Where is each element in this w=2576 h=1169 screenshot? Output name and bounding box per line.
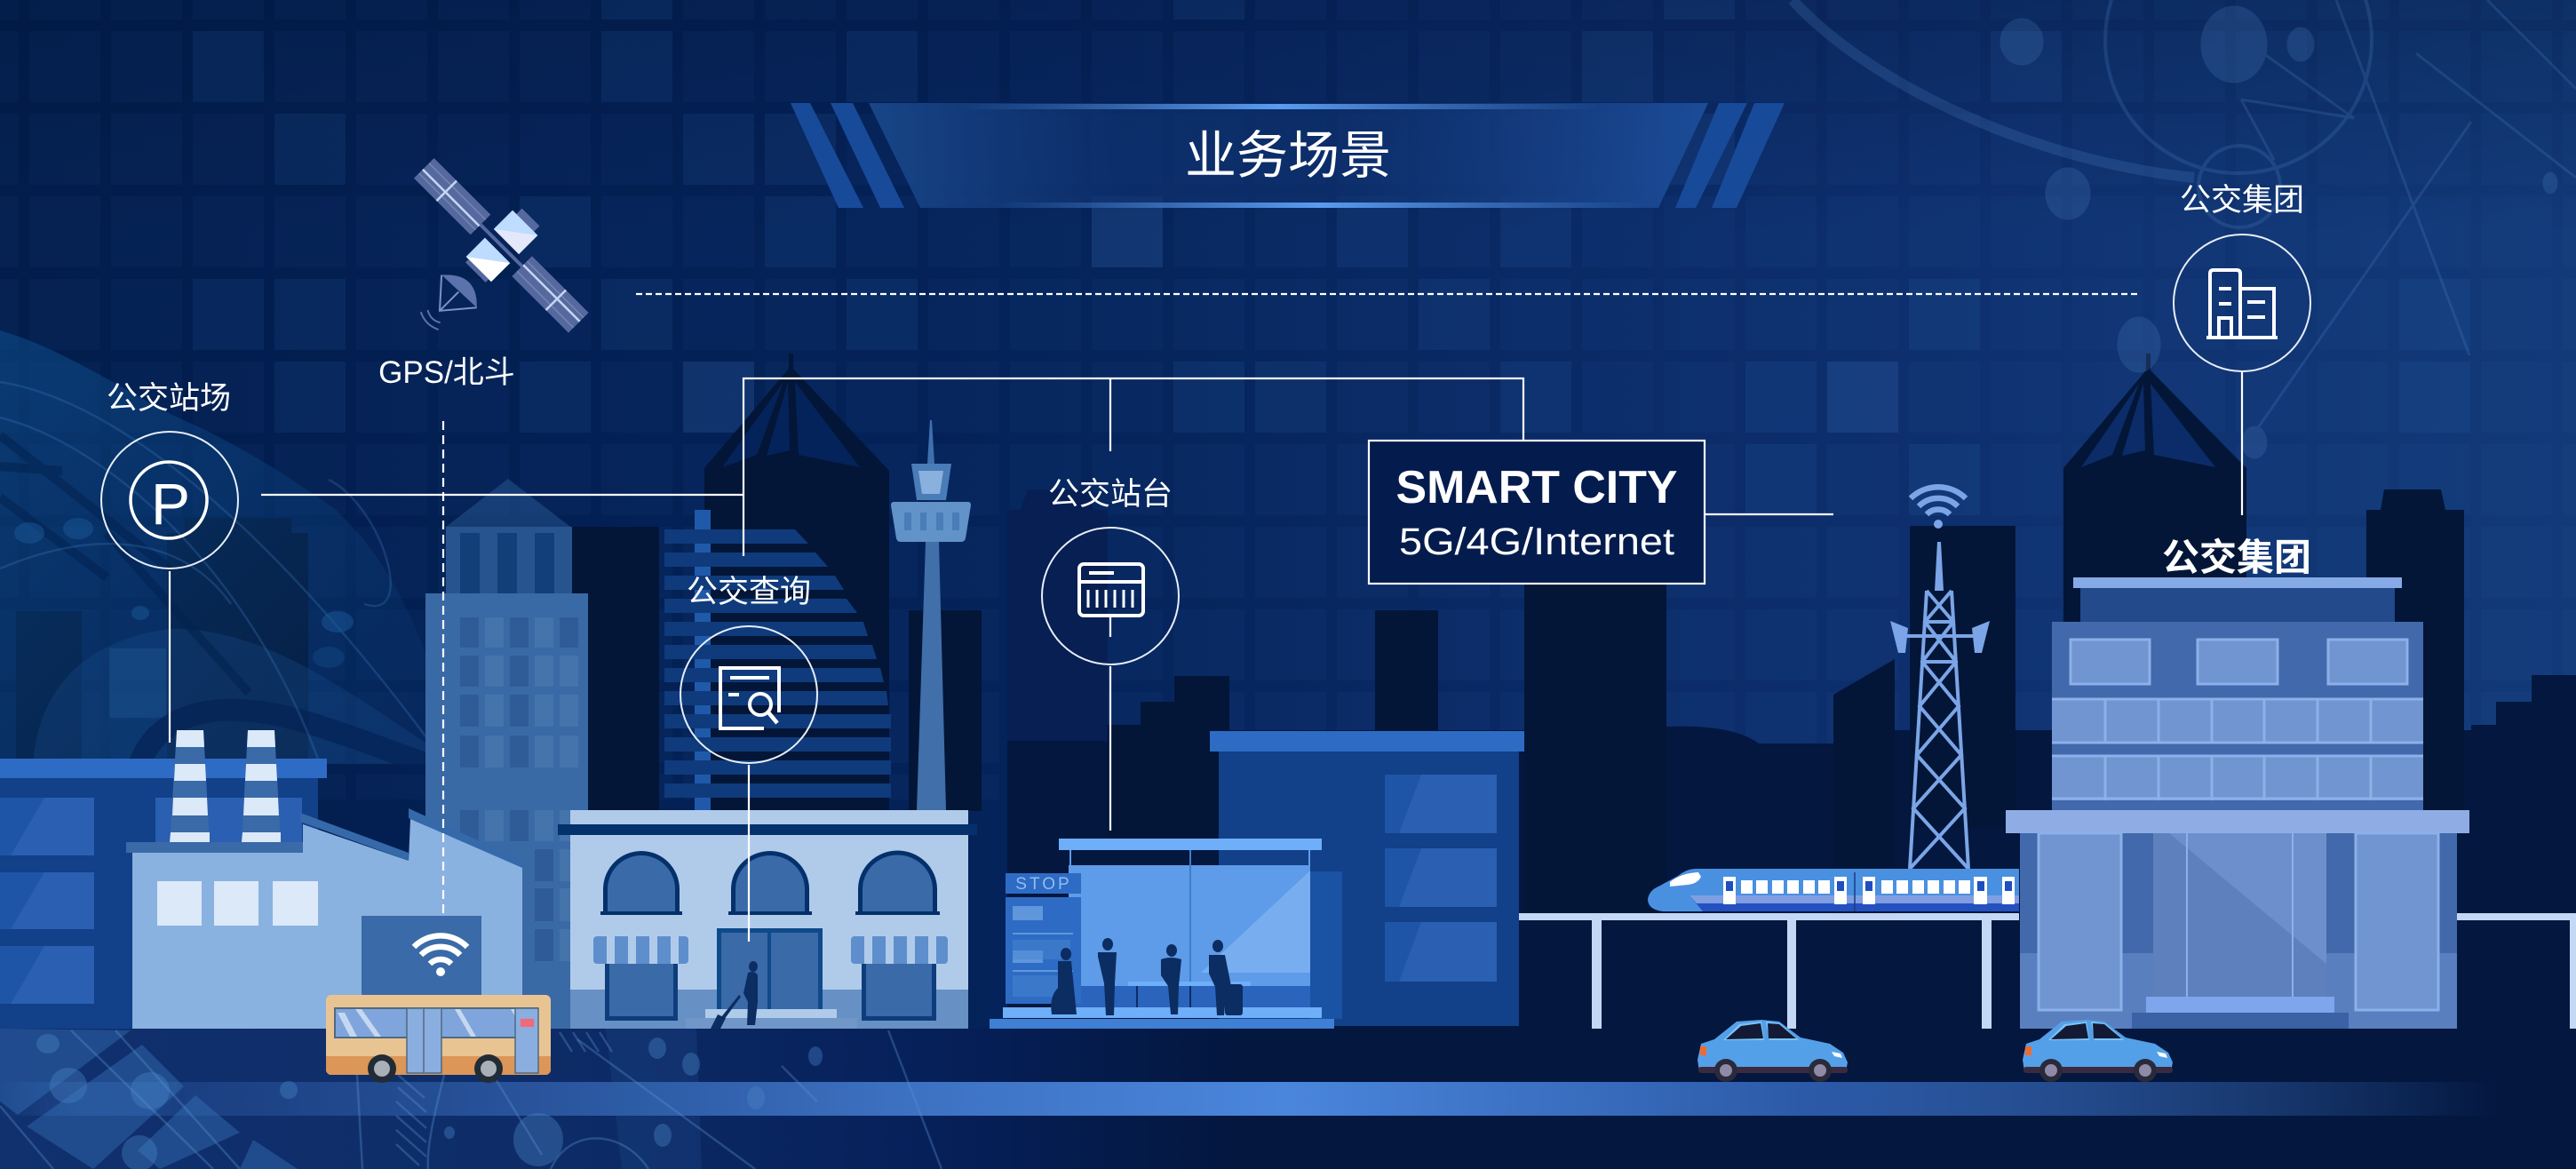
factory: [126, 730, 522, 1029]
label: GPS/Beidou: GPS/北斗: [378, 355, 515, 390]
bus: [326, 995, 551, 1083]
bus stop back building: [1210, 731, 1524, 1026]
title: 业务场景: [1185, 127, 1391, 185]
SMART CITY box: 5G/4G/Internet: [1399, 521, 1674, 563]
node: bus group: 公交集团: [2180, 183, 2304, 218]
title banner: [791, 103, 1785, 208]
tech overlay: circuit arcs left: [0, 330, 426, 764]
node: bus inquiry: [680, 575, 817, 942]
wifi sign: [362, 916, 481, 996]
node: bus depot: P: [151, 471, 190, 537]
stop sign: [1006, 873, 1081, 1004]
ground and road: [0, 1029, 2576, 1169]
connector lines: [261, 378, 1833, 556]
bus shelter: [990, 839, 1342, 1029]
city skyline silhouettes: [16, 354, 2576, 1030]
telecom tower: [1890, 542, 1990, 869]
satellite: [348, 139, 608, 398]
elevated rail: [1519, 913, 2576, 1029]
dashed horizontal link: [636, 293, 2140, 295]
traveller silhouette: [711, 961, 758, 1029]
SMART CITY box: [1369, 441, 1705, 584]
awnings: [593, 936, 948, 964]
waiting passengers: [1051, 938, 1243, 1015]
node: bus platform: [1042, 477, 1179, 831]
node: bus inquiry: 公交查询: [687, 575, 811, 609]
node: bus depot: 公交站场: [107, 381, 231, 416]
tall office tower: [425, 479, 588, 1029]
HQ sign: 公交集团: [2162, 537, 2311, 578]
stop sign: STOP: [1015, 875, 1072, 894]
factory chimneys: [170, 730, 281, 842]
shop building: [558, 810, 977, 1029]
SMART CITY box: SMART CITY: [1396, 462, 1677, 513]
bench: [1128, 982, 1251, 1007]
node: bus group: [2174, 183, 2310, 515]
left blue building: [0, 759, 327, 1029]
control tower: [891, 420, 971, 810]
ground tech pattern: [0, 1029, 942, 1169]
high-speed train: [1648, 869, 2019, 911]
GPS link dashed line: [442, 421, 444, 913]
satellite dish: [441, 265, 486, 309]
node: bus depot: [101, 381, 238, 743]
tower wifi: [1911, 487, 1966, 529]
tech overlay: circuit arcs right: [1793, 0, 2576, 458]
headquarters building: [2006, 577, 2469, 1029]
curved striped building: [664, 510, 891, 813]
car 2: [2023, 1020, 2173, 1082]
node: bus platform: 公交站台: [1048, 477, 1173, 512]
car 1: [1697, 1020, 1848, 1082]
